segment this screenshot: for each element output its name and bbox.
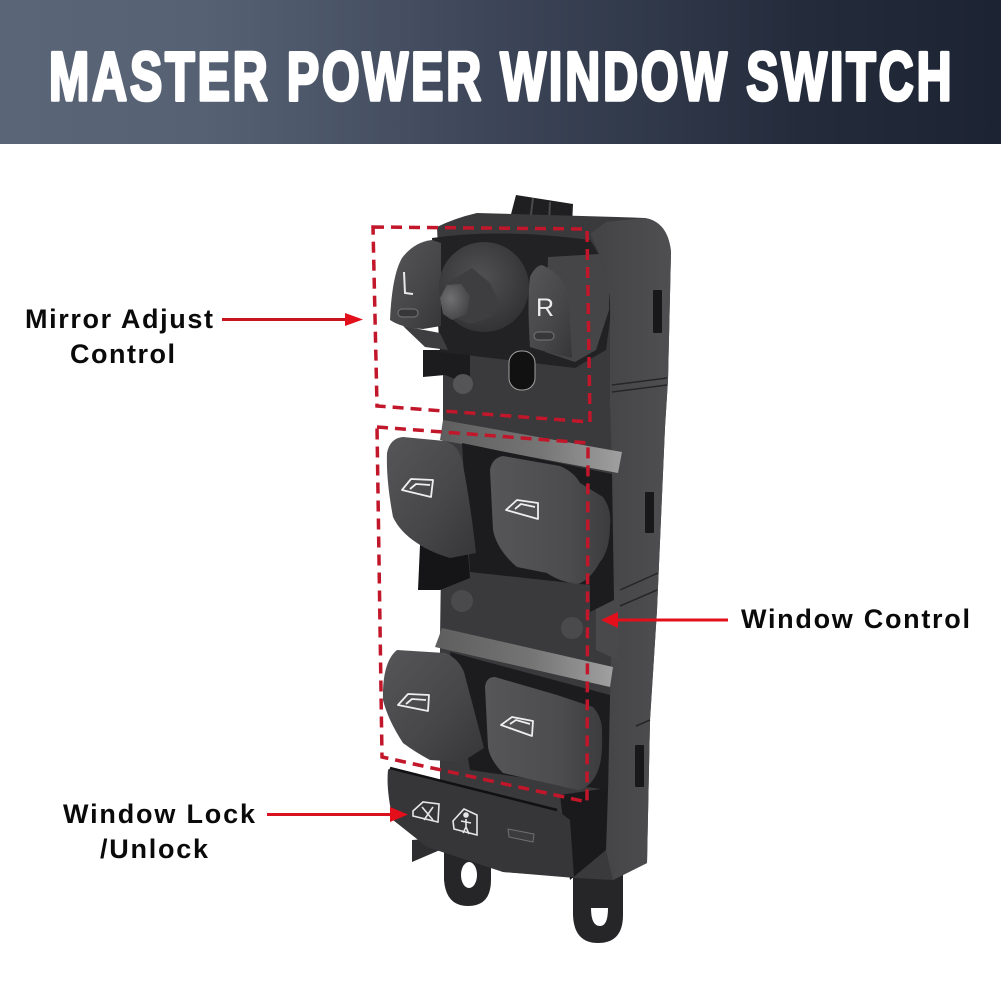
switch body <box>437 213 671 880</box>
peg <box>453 374 473 394</box>
label: mirror adjust control: Mirror Adjust <box>25 304 213 334</box>
icon: window lock <box>413 802 439 822</box>
metal strip upper <box>440 420 622 473</box>
mirror adjust section <box>390 233 610 394</box>
oval slot <box>509 351 535 390</box>
window buttons <box>387 437 614 612</box>
label: mirror adjust control <box>25 304 213 369</box>
window lock button panel <box>388 768 574 877</box>
right side panel <box>590 218 671 880</box>
arrow: mirror adjust <box>222 313 363 326</box>
top connector <box>509 195 573 226</box>
side clip <box>596 586 620 660</box>
dashed box: mirror adjust <box>373 227 590 422</box>
side slots <box>635 290 662 787</box>
arrow: window lock <box>267 807 408 822</box>
label: window lock / unlock: Window Lock <box>63 799 256 829</box>
label: window lock / unlock: /Unlock <box>100 834 209 864</box>
title: MASTER POWER WINDOW SWITCH <box>49 37 954 115</box>
lock base <box>560 788 608 880</box>
product: master window switch <box>383 195 671 943</box>
knob <box>439 242 529 332</box>
mounting loops <box>412 838 623 943</box>
label: window lock / unlock <box>63 799 256 864</box>
header banner <box>0 0 1001 144</box>
icon: child lock <box>453 809 477 835</box>
label: window control: Window Control <box>741 604 970 634</box>
side notches <box>612 378 667 726</box>
button: R: R <box>536 294 554 322</box>
button: R <box>528 254 609 362</box>
dashed box: window control <box>377 427 588 802</box>
button: L <box>390 240 448 350</box>
arrow: window control <box>601 612 728 628</box>
button: window 1 <box>387 437 476 558</box>
metal strip lower <box>435 628 613 687</box>
pegs <box>451 590 583 639</box>
indicator slot <box>508 829 534 842</box>
button: window 2 <box>490 456 610 584</box>
label: mirror adjust control: Control <box>70 339 175 369</box>
button: window 3 <box>383 650 484 762</box>
lower window buttons <box>383 650 610 790</box>
button: window 4 <box>485 677 602 790</box>
